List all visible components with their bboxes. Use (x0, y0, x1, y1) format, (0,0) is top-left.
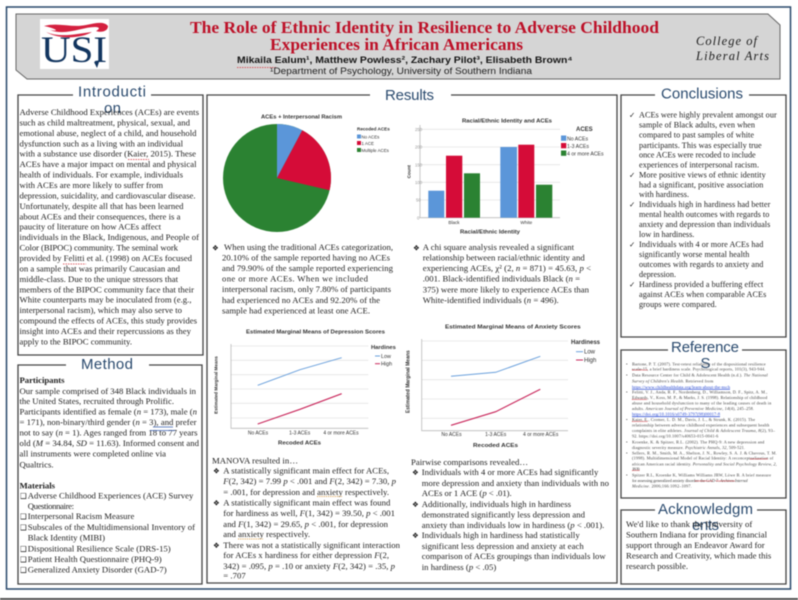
anxiety axis labels: Recoded ACEs (473, 443, 518, 449)
panel: conclusions (621, 86, 786, 337)
conclusions list: experiences of interpersonal racism. (639, 160, 759, 170)
manova text: MANOVA resulted in… (212, 456, 298, 466)
acknowledgements heading: Acknowledgm (658, 501, 753, 518)
references list: complaints in elite athletes. Journal of Child & Adolescent Trauma, 8(2), 93– (632, 428, 776, 434)
conclusions list: outcomes with regards to anxiety and (639, 260, 763, 269)
manova text: and F(1, 342) = 29.65, p < .001, for depression (223, 519, 389, 529)
acknowledgements heading (658, 501, 753, 534)
conclusions list: sample of Black adults, even when (639, 120, 755, 130)
introduction text: such as child maltreatment, physical, sexual, and (20, 117, 191, 127)
conclusions list: More positive views of ethnic identity (639, 170, 767, 180)
panel: acknowledgements (621, 501, 786, 584)
depression axis labels: Estimated Marginal Means (214, 356, 218, 414)
conclusions list: against ACEs when comparable ACEs (639, 290, 766, 299)
references list: scale-15, a brief hardiness scale. Psychological reports, 101(3), 943-944. (632, 366, 765, 372)
introduction text: on a sample that was primarily Caucasian and (20, 264, 181, 274)
references list: (1998). Multidimensional Model of Racial Identity: A reconceptualization of (632, 456, 774, 461)
method border (18, 365, 202, 584)
introduction text: provided by Felitti et al. (1998) on ACEs focused (20, 253, 193, 263)
college name: College of (696, 34, 759, 48)
manova text: for ACEs x hardiness for either depression F(2, (223, 550, 389, 560)
references list: Edwards, V., Koss, M. P., & Marks, J. S. (1998). Relationship of childhood (632, 395, 768, 401)
y tick labels: 150 (415, 162, 423, 167)
depression legend: Hardines (371, 345, 396, 351)
conclusions list: depression. (639, 270, 676, 279)
bar axis labels (406, 165, 533, 236)
bar chart finding text: .001. Black-identified individuals Black (n = (423, 274, 580, 284)
manova text: There was not a statistically significant interaction (223, 540, 401, 550)
pie legend: Recoded ACEs (357, 126, 390, 132)
depression legend: High (381, 362, 392, 368)
pairwise text: Individuals high in hardiness had statistically (422, 530, 580, 540)
depression axis labels (214, 356, 359, 447)
bar chart finding text: ❖ (413, 244, 420, 252)
anxiety legend: High (584, 358, 596, 364)
materials list: ❑ (20, 555, 27, 564)
depression low line (258, 358, 342, 385)
conclusions list: mental health outcomes with regards to (639, 210, 769, 219)
pie legend: 1 ACE (362, 141, 374, 146)
y tick labels: 100 (415, 180, 423, 185)
references list: https://doi.org/10.1016/s0749-3797(98)00017-8 (632, 412, 720, 417)
conclusions heading: Conclusions (661, 86, 743, 102)
line chart: anxiety (406, 325, 601, 449)
title: The Role of Ethnic Identity in Resilience to Adverse Childhood (190, 18, 659, 37)
participants text: Qualtrics. (20, 460, 54, 470)
logo: USI: USI (41, 30, 107, 71)
introduction text: apply to the BIPOC community. (20, 336, 132, 346)
manova text (212, 456, 401, 580)
references list: 18-39. (632, 466, 640, 471)
depression axis labels: 1-3 ACEs (289, 430, 311, 436)
references heading: S (700, 355, 711, 372)
pairwise text: ❖ (412, 468, 419, 477)
introduction text: about ACEs and their consequences, there is a (20, 211, 181, 221)
references list: adults. American Journal of Preventive Medicine, 14(4), 245–258. (632, 406, 754, 412)
manova text: A statistically significant main effect for ACEs, (223, 466, 389, 476)
manova text: ❖ (213, 466, 220, 476)
depression high line (258, 394, 342, 424)
pie title: ACEs + Interpersonal Racism (261, 115, 342, 121)
conclusions list: low in hardiness. (639, 230, 694, 239)
references list: • (626, 362, 628, 367)
bar axis labels: Racial/Ethnic Identity (460, 230, 520, 236)
materials list: ❑ (20, 566, 27, 574)
title: Experiences in African Americans (270, 35, 524, 54)
introduction text: paucity of literature on how ACEs affect (20, 222, 162, 232)
references list: diagnostic severity measure. Psychiatric Annals, 32, 509-521. (632, 445, 745, 451)
introduction text: insight into ACEs and their repercussions as they (20, 326, 192, 336)
depression legend: Low (381, 354, 391, 360)
conclusions list: Individuals high in hardiness had better (639, 200, 771, 209)
participants text: Participants (20, 375, 65, 385)
introduction text: compound the effects of ACEs, this study provides (20, 316, 198, 326)
bar legend (561, 127, 604, 158)
pairwise text: significant less depression and anxiety at each (422, 541, 584, 551)
references list: Felitti, V. J., Anda, R. F., Nordenberg, D., Williamson, D. F., Spitz, A. M., (632, 390, 767, 396)
materials list (20, 480, 195, 574)
bar legend: 1-3 ACEs (567, 144, 589, 150)
bar chart finding text: White-identified individuals (n = 496). (423, 295, 559, 305)
references list: Survey of Children's Health. Retrieved from (632, 378, 714, 383)
anxiety chart title: Estimated Marginal Means of Anxiety Scores (445, 325, 581, 331)
conclusions list: ACEs were highly prevalent amongst our (639, 110, 777, 120)
pie finding text: one or more ACEs. When we included (222, 274, 369, 284)
bar grid (420, 129, 560, 200)
references list: Bartone, P. T. (2007). Test-retest reliability of the dispositional resilience (632, 362, 766, 368)
manova text: ❖ (213, 541, 220, 550)
participants text: all instruments were completed online via (20, 448, 166, 458)
references list: Kaier, E., Cromer, L. D. M., Davis, J. L., & Strunk, K. (2015). The (632, 417, 755, 423)
introduction text: depression, suicidality, and cardiovascular disease. (20, 190, 196, 200)
participants text: Participants identified as female (n = 173), male (n (20, 406, 197, 416)
materials list: Questionnaire: (28, 501, 74, 511)
manova text: = .707 (223, 570, 246, 580)
anxiety grid (422, 341, 568, 418)
introduction text: with a substance use disorder (Kaier, 2015). These (20, 149, 196, 159)
materials list: Adverse Childhood Experiences (ACE) Survey (28, 490, 194, 500)
pairwise text: demonstrated significantly less depression and (422, 510, 586, 520)
materials list: Generalized Anxiety Disorder (GAD-7) (28, 564, 167, 574)
conclusions list: Individuals with 4 or more ACEs had (639, 240, 763, 249)
bar chart (406, 119, 604, 236)
introduction heading (78, 84, 146, 117)
conclusions list: with hardiness. (639, 190, 689, 199)
panel: results (207, 87, 617, 583)
references list: • (626, 372, 628, 377)
conclusions list: had a significant, positive association (639, 180, 763, 190)
results heading: Results (385, 87, 434, 104)
references list (626, 362, 777, 488)
pairwise text: Pairwise comparisons revealed… (411, 457, 528, 467)
references list: • (626, 439, 628, 444)
affiliation: ¹Department of Psychology, University of Southern Indiana (270, 66, 532, 76)
acknowledgements text (626, 519, 772, 571)
manova text: F(2, 342) = 7.99 p < .001 and F(2, 342) = 7.30, p (222, 476, 397, 486)
introduction text: individuals in the Black, Indigenous, and People of (20, 232, 199, 242)
manova text: = .001, for depression and anxiety respectively. (223, 487, 389, 497)
logo: USI (40, 19, 109, 71)
manova text: and anxiety respectively. (223, 529, 310, 539)
pie finding text: sample had experienced at least one ACE. (222, 306, 370, 316)
introduction text: with ACEs are more likely to suffer from (20, 180, 163, 190)
introduction text: ACEs have a major impact on mental and physical (20, 159, 197, 169)
anxiety axis labels: No ACEs (441, 432, 462, 438)
references list: • (626, 472, 628, 477)
manova text: A statistically significant main effect was found (223, 498, 391, 508)
conclusions list: ✓ (629, 110, 635, 120)
bar legend: ACES (576, 127, 593, 133)
conclusions list: ✓ (629, 200, 635, 209)
bar chart finding text: A chi square analysis revealed a significant (423, 242, 575, 252)
pie finding text: and 79.90% of the sample reported experiencing (222, 263, 394, 273)
y tick labels (415, 127, 423, 220)
anxiety low line (451, 356, 540, 376)
line chart: depression (214, 330, 396, 447)
authors: Mikaila Ealum¹, Matthew Powless², Zachary Pilot³, Elisabeth Brown⁴ (237, 55, 573, 66)
manova text: for hardiness as well, F(1, 342) = 39.50, p < .001 (223, 508, 395, 518)
pie legend (357, 126, 390, 153)
conclusions list: ✓ (629, 170, 635, 180)
acknowledgements text: Research and Creativity, which made this (626, 550, 772, 560)
materials list: Black Identity (MIBI) (28, 532, 105, 542)
pie finding text: 20.10% of the sample reported having no ACEs (222, 252, 391, 262)
bars (428, 145, 552, 218)
anxiety legend (571, 340, 601, 364)
pairwise text: ACEs or 1 ACE (p < .01). (422, 488, 512, 498)
conclusions list: groups were compared. (639, 300, 717, 309)
bar chart title: Racial/Ethnic Identity and ACEs (462, 119, 552, 125)
conclusions list (629, 110, 777, 309)
pie finding text: When using the traditional ACEs categorization, (224, 242, 393, 252)
acknowledgements heading: ents (692, 517, 719, 534)
pie finding text: ❖ (212, 244, 219, 252)
header banner (16, 14, 780, 79)
participants text: = 171), non-binary/third gender (n = 3), and prefer (20, 417, 197, 427)
pie finding text: had experienced no ACEs and 92.20% of the (222, 295, 380, 305)
bar axis labels: White (520, 220, 533, 225)
references heading (671, 339, 739, 372)
references heading: Reference (671, 339, 739, 356)
materials list: Subscales of the Multidimensional Inventory of (28, 522, 195, 532)
depression grid (231, 346, 368, 418)
introduction text: middle-class. Due to the unique stressors that (20, 274, 179, 284)
references list: https://www.childhealthdata.org/learn-about-the-nsch (632, 384, 731, 389)
references list: Data Resource Center for Child & Adolescent Health (n.d.). The National (632, 372, 768, 377)
acknowledgements text: support through an Endeavor Award for (626, 540, 765, 550)
results border (207, 95, 617, 583)
panel: references (621, 339, 786, 498)
anxiety legend: Hardiness (571, 340, 601, 346)
references list: abuse and household dysfunction to many of the leading causes of death in (632, 400, 772, 405)
conclusions list: Hardiness provided a buffering effect (639, 280, 764, 289)
references list: Kroenke, K. & Spitzer, R.L. (2002). The PHQ-9: A new depression and (632, 439, 765, 445)
introduction text: White counterparts may be inoculated from (e.g., (20, 295, 192, 305)
pairwise text: anxiety than individuals low in hardiness (p < .001). (422, 520, 604, 530)
materials list: ❑ (20, 512, 27, 521)
pie legend: No ACEs (362, 135, 380, 140)
introduction text: emotional abuse, neglect of a child, and household (20, 128, 197, 138)
bar axis labels: Black (448, 220, 460, 225)
bar chart finding text (413, 242, 591, 305)
title (190, 18, 659, 54)
participants text: not to say (n = 1). Ages ranged from 18 to 77 years (20, 428, 198, 438)
participants text: the United States, recruited through Prolific. (20, 396, 174, 406)
materials list: ❑ (20, 544, 27, 554)
materials list: Patient Health Questionnaire (PHQ-9) (28, 554, 162, 564)
introduction text: Color (BIPOC) community. The seminal work (20, 243, 179, 253)
conclusions border (621, 95, 786, 337)
manova text: 342) = .095, p = .10 or anxiety F(2, 342) = .35, p (223, 561, 396, 571)
introduction text (20, 107, 200, 346)
acknowledgements text: We'd like to thank the University of (626, 519, 752, 529)
references list: • (626, 450, 628, 455)
introduction text: interpersonal racism), which may also serve to (20, 305, 183, 315)
references list: • (626, 390, 628, 395)
panel: method (18, 356, 202, 584)
pie chart (223, 115, 390, 232)
conclusions list: ✓ (629, 280, 635, 289)
references list: • (626, 417, 628, 422)
bar chart finding text: relationship between racial/ethnic identity and (423, 252, 585, 262)
pie finding text (212, 242, 394, 316)
materials list: ❑ (20, 523, 27, 532)
method heading: Method (81, 356, 133, 373)
pairwise text: ❖ (412, 500, 419, 509)
references list: Medicine. 2006;166:1092–1097. (631, 483, 692, 488)
bar chart finding text: experiencing ACEs, χ² (2, n = 871) = 45.63, p < (423, 263, 591, 273)
materials list: Materials (20, 480, 56, 490)
depression chart title: Estimated Marginal Means of Depression Scores (246, 330, 385, 336)
bar legend: 4 or more ACEs (567, 152, 604, 158)
pairwise text: Additionally, individuals high in hardiness (422, 499, 572, 509)
bar chart finding text: 375) were more likely to experience ACEs than (423, 284, 590, 294)
introduction text: Adverse Childhood Experiences (ACEs) are events (20, 107, 200, 117)
y tick labels: 200 (415, 145, 423, 150)
college name (695, 34, 769, 63)
participants text (20, 375, 200, 470)
references list: Sellers, R. M., Smith, M. A., Shelton, J. N., Rowley, S. A. J. & Chavous, T. M. (632, 450, 777, 456)
materials list: Dispositional Resilience Scale (DRS-15) (28, 544, 171, 554)
references border (621, 350, 786, 498)
banner background (16, 14, 780, 79)
conclusions list: participants. This was especially true (639, 141, 762, 150)
introduction text: members of the BIPOC community face that their (20, 284, 194, 294)
depression axis labels: No ACEs (248, 430, 269, 436)
anxiety axis labels: 4 or more ACEs (523, 432, 559, 438)
materials list: Interpersonal Racism Measure (28, 511, 134, 521)
depression legend (371, 345, 396, 368)
references list: african American racial identity. Personality and Social Psychology Review, 2, (632, 461, 777, 467)
anxiety axis labels: Estimated Marginal Means (406, 350, 412, 413)
participants text: old (M = 34.84, SD = 11.63). Informed consent and (20, 438, 200, 448)
pairwise text: in hardiness (p < .05) (422, 562, 496, 572)
introduction text: health of individuals. For example, individuals (20, 170, 184, 180)
introduction border (18, 95, 203, 355)
manova text: ❖ (213, 498, 220, 508)
introduction text: Unfortunately, despite all that has been learned (20, 201, 184, 211)
y tick labels: 250 (415, 127, 423, 132)
references list: relationship between adverse childhood experiences and subsequent health (632, 422, 770, 427)
conclusions list: anxiety and depression than individuals (639, 220, 770, 229)
acknowledgements text: Southern Indiana for providing financial (626, 530, 768, 540)
acknowledgements text: research possible. (626, 561, 688, 571)
conclusions list: ✓ (629, 240, 635, 249)
pairwise text: ❖ (412, 531, 419, 540)
pairwise text: more depression and anxiety than individuals with no (422, 478, 610, 488)
anxiety high line (451, 389, 540, 425)
bar legend: No ACEs (567, 136, 588, 142)
materials list: ❑ (20, 492, 27, 500)
college name: Liberal Arts (695, 49, 769, 63)
introduction heading: on (104, 100, 121, 117)
anxiety axis labels (406, 350, 559, 449)
introduction heading: Introducti (78, 84, 146, 100)
references list: for assessing generalized anxiety disorder: the GAD-7. Archives Internal (632, 478, 748, 483)
pie legend: Multiple ACEs (362, 148, 390, 153)
conclusions list: compared to past samples of white (639, 130, 754, 140)
panel: introduction (18, 84, 203, 355)
pairwise text (411, 457, 610, 572)
acknowledgements border (621, 510, 786, 584)
pairwise text: Individuals with 4 or more ACEs had significantly (422, 467, 599, 477)
introduction text: dysfunction such as a living with an individual (20, 138, 184, 148)
y tick labels: 50 (416, 198, 421, 203)
conclusions list: significantly worse mental health (639, 250, 749, 259)
anxiety axis labels: 1-3 ACEs (485, 432, 507, 438)
conclusions list: once ACEs were recoded to include (639, 150, 756, 160)
bar axis labels: Count (406, 165, 412, 178)
depression axis labels: Recoded ACEs (278, 441, 321, 447)
references list: 92. https://doi.org/10.1007/s40653-015-0041-6 (632, 433, 719, 438)
pairwise text: comparison of ACEs groupings than individuals low (422, 551, 606, 561)
references list: Spitzer R.L, Kroenke K, Williams Williams JBW, Löwe B. A brief measure (632, 472, 771, 478)
anxiety legend: Low (584, 350, 596, 356)
depression axis labels: 4 or more ACEs (323, 430, 359, 436)
y tick labels: 0 (417, 215, 420, 220)
pie slices (223, 124, 331, 232)
participants text: Our sample comprised of 348 Black individuals in (20, 386, 197, 396)
pie finding text: interpersonal racism, only 7.80% of participants (222, 284, 392, 294)
